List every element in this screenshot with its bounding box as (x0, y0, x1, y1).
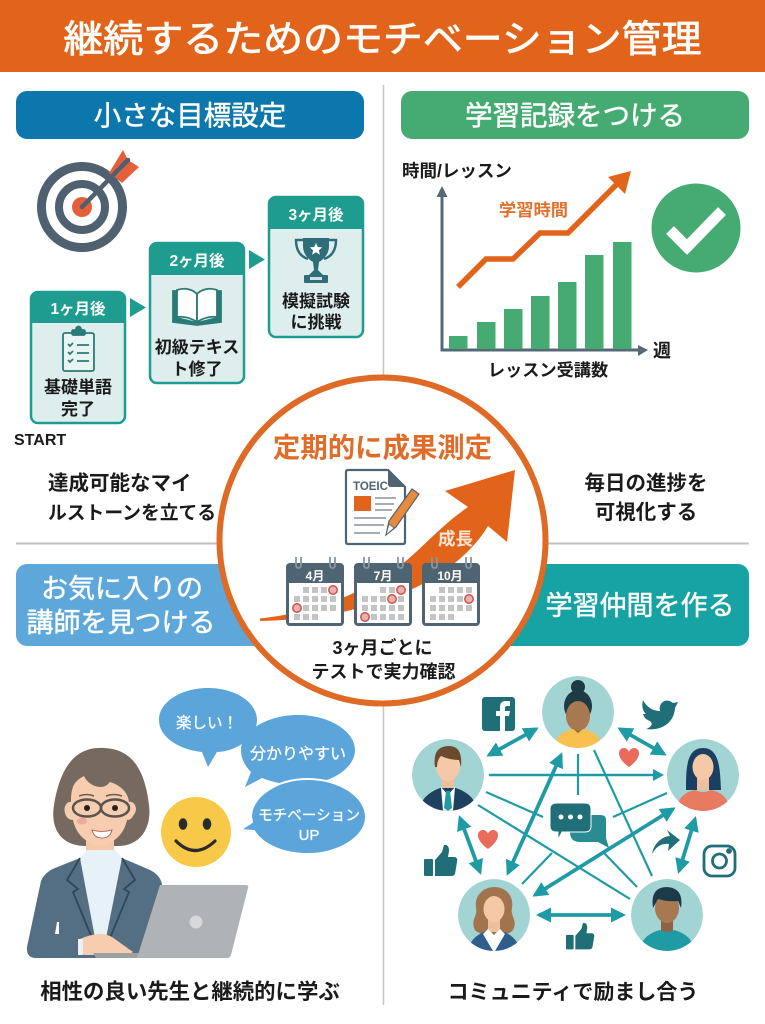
text: daily progress (584, 472, 708, 524)
step: month 2: 初級テキス (155, 338, 239, 357)
step: month 1 (31, 292, 125, 423)
icon: smiley (161, 797, 231, 867)
person: bottom-right man (631, 879, 703, 951)
icon: TOEIC sheet with pencil (346, 470, 419, 544)
text: milestones: ルストーンを立てる (48, 502, 216, 523)
step: month 3: に挑戦 (290, 312, 342, 332)
speech bubble: motivation up: モチベーション (258, 808, 360, 824)
panel: study log (401, 91, 749, 524)
speech bubble: motivation up: UP (299, 827, 319, 844)
step: month 2: ト修了 (172, 360, 222, 379)
icon: TOEIC sheet with pencil: TOEIC (353, 481, 388, 493)
panel: favorite teacher (16, 564, 366, 1004)
heading: study log (401, 91, 749, 139)
chart: lessons and study time: 時間/レッスン (402, 161, 512, 181)
calendar: October (422, 557, 480, 626)
label: START: START (14, 432, 66, 449)
icon: check mark (652, 184, 740, 272)
step: month 3: 模擬試験 (282, 291, 350, 311)
icon: heart right (619, 748, 639, 767)
heading: small goals (16, 91, 364, 139)
step: month 1: 1ヶ月後 (50, 299, 106, 318)
step: month 2 (150, 243, 244, 383)
text: encourage in community: コミュニティで励まし合う (448, 981, 698, 1004)
icon: thumbs up left (424, 845, 457, 876)
icon: instagram (704, 846, 735, 876)
icon: chat bubbles (550, 803, 609, 848)
illustration: teacher with laptop (27, 748, 248, 958)
icon: open book (173, 289, 221, 325)
speech bubble: easy to understand (241, 715, 355, 787)
heading: favorite teacher (16, 564, 270, 646)
calendar: April: 4月 (306, 569, 324, 583)
person: left man (412, 739, 484, 811)
step: month 1: 基礎単語 (44, 378, 112, 397)
step: month 2: 2ヶ月後 (169, 251, 225, 270)
person: top woman (542, 676, 614, 748)
arrow: growth (260, 470, 515, 621)
panel: small goals (14, 91, 364, 523)
panel: study friends (412, 564, 749, 1004)
speech bubble: fun (159, 688, 257, 767)
icon: thumbs up bottom (566, 923, 594, 949)
calendar: April (286, 557, 344, 626)
person: right woman (667, 739, 739, 811)
chart: lessons and study time (402, 161, 671, 380)
calendar: July (354, 557, 412, 626)
center circle: regular measurement (220, 378, 546, 704)
text: test every 3 months: 3ヶ月ごとに (332, 637, 433, 658)
speech bubble: easy to understand: 分かりやすい (250, 745, 346, 763)
connection arrows (460, 729, 695, 915)
text: daily progress: 毎日の進捗を (584, 472, 708, 495)
chart: lessons and study time: レッスン受講数 (488, 360, 608, 380)
title banner: 継続するためのモチベーション管理 (64, 18, 702, 60)
text: milestones: 達成可能なマイ (48, 471, 192, 495)
step: month 3: 3ヶ月後 (288, 205, 344, 224)
heading: regular measurement: 定期的に成果測定 (273, 432, 492, 463)
icon: trophy (296, 238, 336, 283)
step: month 1: 完了 (61, 400, 95, 419)
heading: study friends: 学習仲間を作る (546, 591, 734, 621)
chart: lessons and study time: 週 (653, 341, 671, 361)
calendar: October: 10月 (437, 569, 463, 583)
text: daily progress: 可視化する (595, 501, 697, 524)
icon: heart left (478, 830, 498, 849)
arrow: month 1 to 2 (130, 298, 146, 317)
speech bubble: fun: 楽しい！ (176, 714, 238, 732)
icon: twitter bird (642, 700, 678, 729)
speech bubble: motivation up (240, 779, 366, 854)
step: month 3 (269, 197, 363, 337)
chart: lessons and study time: 学習時間 (499, 200, 568, 220)
calendar: July: 7月 (374, 569, 392, 583)
text: learn with teacher: 相性の良い先生と継続的に学ぶ (40, 980, 340, 1004)
icon: share arrow (652, 830, 680, 854)
person: bottom-left woman (458, 879, 530, 951)
heading: study friends (495, 564, 749, 646)
arrow: month 2 to 3 (249, 250, 265, 269)
text: test every 3 months (312, 637, 456, 682)
icon: clipboard (63, 326, 94, 371)
text: milestones (48, 471, 216, 523)
text: test every 3 months: テストで実力確認 (312, 662, 456, 682)
icon: target with arrow (42, 150, 139, 248)
heading: small goals: 小さな目標設定 (94, 100, 286, 131)
heading: favorite teacher: お気に入りの (41, 574, 203, 604)
heading: favorite teacher: 講師を見つける (26, 608, 216, 638)
diagram: community network (412, 676, 739, 951)
icon: facebook (482, 697, 515, 731)
label: growth: 成長 (438, 529, 473, 549)
title banner (0, 0, 765, 72)
heading: study log: 学習記録をつける (465, 100, 685, 131)
